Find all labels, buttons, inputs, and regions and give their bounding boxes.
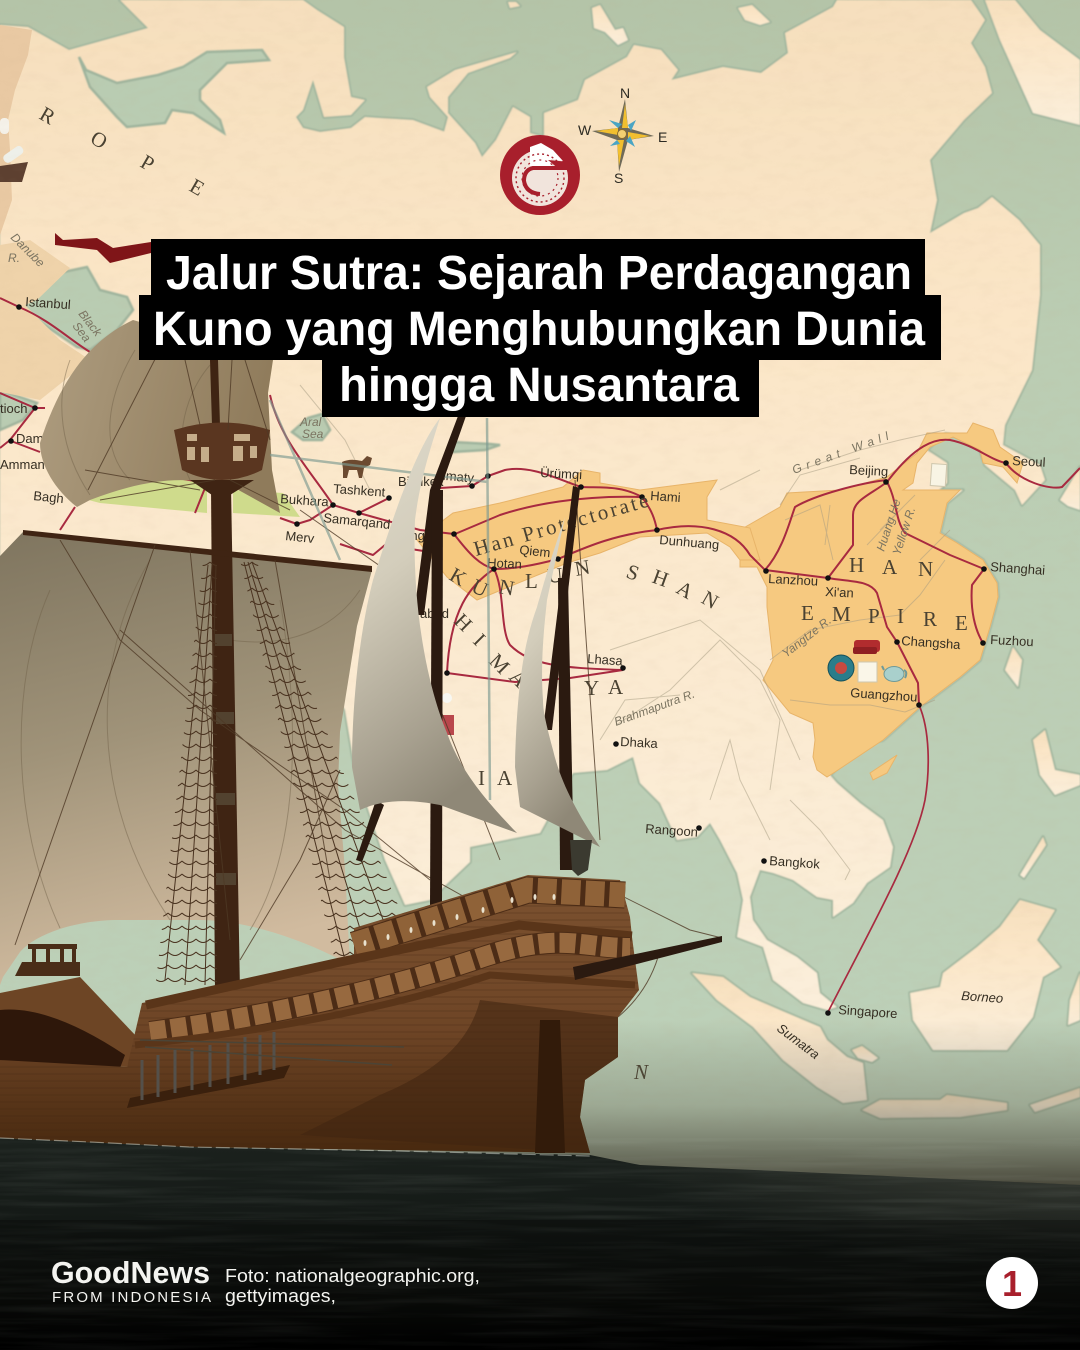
map labels: abad [420,606,449,621]
map labels: EMPIRE [801,601,968,635]
map labels: Han Protectorate [471,487,654,561]
map labels: HAN [849,553,933,581]
main yard [23,530,372,572]
sea: northern gulf [79,50,269,133]
wale [135,975,635,1045]
map labels: Rangoon [645,821,698,840]
map labels: N [633,1060,649,1084]
stem post [535,1020,565,1153]
icon: paper in sea [930,464,947,487]
map labels: Kashgar [388,528,437,543]
map labels: Fuzhou [990,632,1034,649]
land: Palawan [1020,837,1046,878]
forecastle port holes [364,894,556,946]
territory: Han Protectorate [417,470,760,600]
map labels: Black [76,307,105,340]
icon: decorated plate [828,655,854,681]
compass rose: N [620,85,630,101]
map labels: IA [478,766,513,790]
photo credit [225,1266,480,1306]
map labels: Qiem [519,542,551,560]
land: Sumatra [692,973,867,1103]
land: Philippines [1033,730,1080,795]
land: Malay islands small [852,1046,878,1062]
title [139,239,941,417]
map labels [0,102,1046,1084]
rigging [15,330,722,1017]
map labels: Yangtze R. [779,613,834,660]
map labels: Hami [650,488,681,505]
map labels: Tashkent [333,481,386,500]
stern castle [0,944,137,1068]
page number badge [986,1257,1038,1309]
foremast [414,416,466,615]
photo credit: Foto: nationalgeographic.org, [225,1266,480,1286]
logo [500,135,580,215]
icon: small goods near India [442,693,454,735]
Roman lands tan [0,240,90,400]
brand logo text: GoodNews [51,1255,210,1290]
map labels: tioch [0,401,27,416]
gunwale arcade [150,943,630,1032]
snow and beast on Europe edge [0,118,28,182]
map labels: Dam [16,431,43,446]
city dots [8,304,1009,1016]
map labels: Lhasa [587,651,624,669]
map labels: R. [8,251,20,265]
sail: upper mainsail [40,320,280,513]
foam at waterline [0,1138,590,1156]
mainmast [210,360,240,992]
territory: Hainan [870,755,897,780]
land: Japan [1060,467,1080,510]
sea: Balkhash [452,442,500,452]
map labels: Bagh [33,488,64,506]
map labels: Beijing [849,462,889,479]
title: Jalur Sutra: Sejarah Perdagangan [166,247,912,300]
map labels: Yellow R. [890,505,918,557]
map labels: Sea [70,319,94,345]
map labels: Bukhara [280,491,330,509]
Parthia green territory [77,470,300,517]
map labels: ROPE [36,102,209,201]
ocean [0,1138,1080,1350]
map labels: Dunhuang [659,532,720,552]
map labels: KUNLUN [446,555,592,602]
compass rose: E [658,129,667,145]
icon: teapot [882,666,906,682]
crow's nest [174,422,270,495]
map labels: Brahmaputra R. [612,687,697,729]
bottom vignette [0,1220,1080,1350]
fog fading the map [0,1020,1080,1190]
top rail [146,925,632,1005]
map labels: YA [584,675,624,700]
seas inside the land [0,50,500,452]
page number badge: 1 [1002,1263,1022,1304]
sail seams [21,350,360,930]
sail: aft fore sail [515,517,600,847]
map labels: Great Wall [790,427,895,477]
map labels: Dhaka [620,734,659,751]
map labels: Merv [285,528,315,546]
map labels: Borneo [961,988,1004,1006]
map labels: Guangzhou [850,685,918,705]
compass rose [578,85,667,186]
hull plank lines [0,875,639,1153]
brand logo text [51,1255,211,1306]
map labels: HIMA [449,609,533,693]
land: lesser islands [1030,1088,1080,1112]
photo credit: gettyimages, [225,1286,336,1306]
map labels: Shanghai [990,559,1046,578]
map labels: Almaty [434,467,475,485]
banner ribbon [55,233,151,263]
sea: Mediterranean [0,390,37,430]
teal stays [270,400,490,800]
rivers and borders [300,385,950,880]
bow shadow [300,1000,618,1153]
icon: paper [858,662,877,682]
territory: Han Empire mainland and Korea [740,423,1023,777]
map labels: Sumatra [774,1020,822,1062]
ship [0,320,722,1156]
sea: Aral [292,414,330,440]
map labels: Xi'an [825,584,854,600]
map labels: Istanbul [25,294,71,312]
map labels: Bishkek [398,474,444,489]
land: north-east peninsula [985,0,1080,125]
land: Borneo [910,900,1060,1050]
hull [0,875,639,1153]
map labels: Ürümqi [540,465,583,482]
lantern [570,840,592,876]
icon: horse [342,456,372,478]
compass rose: S [614,170,623,186]
map labels: Changsha [901,633,962,652]
compass rose: W [578,122,592,138]
map labels: Hotan [487,555,522,572]
map labels: Aral [299,415,322,429]
title: Kuno yang Menghubungkan Dunia [153,303,925,356]
title: hingga Nusantara [339,359,739,412]
map labels: Lanzhou [768,571,818,589]
forecastle panels [354,890,625,945]
map labels: Singapore [838,1002,898,1021]
channel deadeyes [127,1065,290,1108]
bowsprit [573,936,722,980]
map labels: Bangkok [769,853,821,872]
map labels: Sea [302,427,324,441]
icon: silk bolt [853,640,880,654]
brand logo text: FROM INDONESIA [52,1289,211,1306]
Europe tan territory [0,25,32,235]
land: Sulawesi [1068,973,1080,1025]
trade routes [0,298,1080,1012]
land: Arctic islands [508,2,770,45]
land: Java [862,1095,1007,1118]
land: Eurasia [0,0,1045,1010]
Han Empire territory [417,423,1023,780]
map labels: Samarqand [323,510,391,532]
map labels: Amman [0,457,45,472]
shroud bars [142,1032,274,1100]
map labels: Danube [8,230,48,270]
map labels: SHAN [623,559,723,614]
land: Taiwan [1005,647,1022,687]
sail: large fore sail [352,418,517,833]
ratlines [155,560,400,990]
map labels: Huang He [874,497,904,553]
map labels: Seoul [1012,453,1046,470]
sea: Black Sea [10,267,133,350]
sail: lower mainsail [0,532,372,985]
